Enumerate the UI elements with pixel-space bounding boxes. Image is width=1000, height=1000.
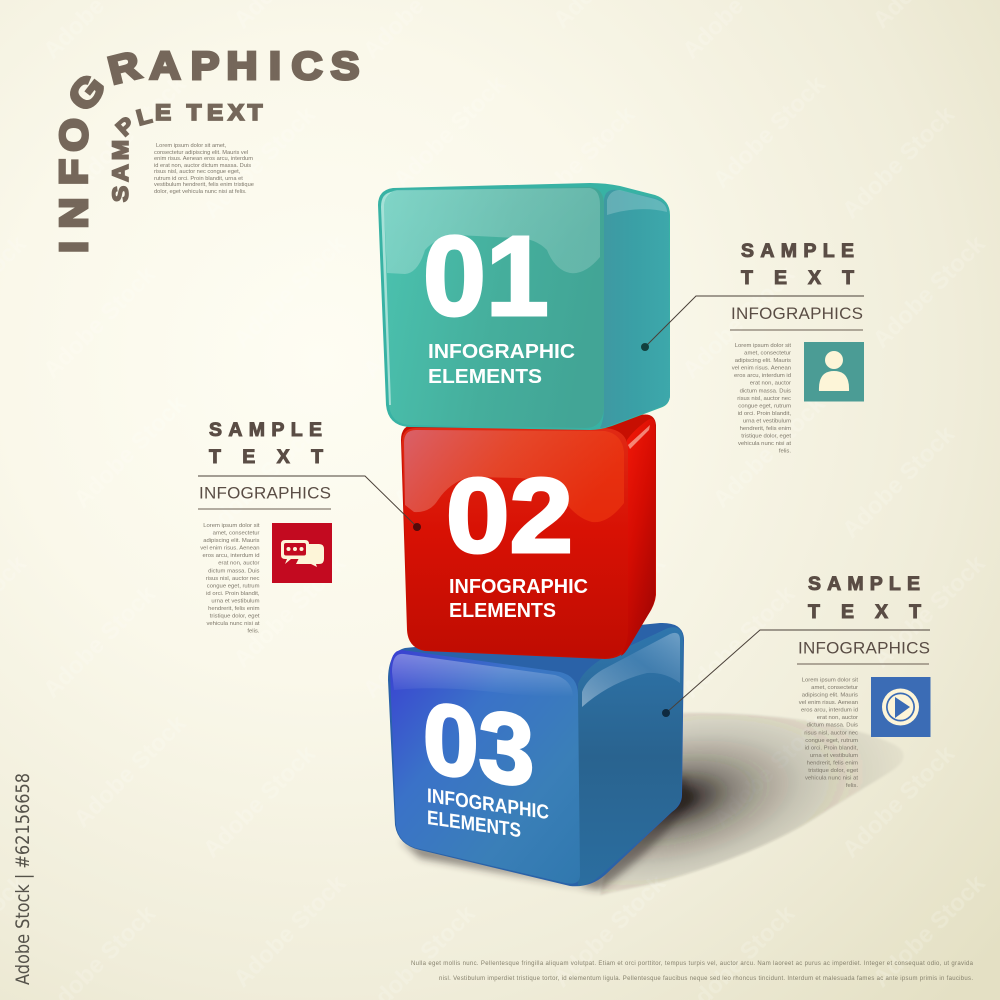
cube 02 label: ELEMENTS [449, 600, 556, 622]
intro paragraph: Lorem ipsum dolor sit amet, [156, 143, 227, 149]
paragraph 02: felis. [247, 629, 260, 635]
curved subtitle: SAMPLE TEXT: T [248, 100, 262, 125]
paragraph 03: felis. [846, 783, 858, 789]
cube 01 left glint [381, 192, 392, 405]
paragraph 03: vehicula nunc nisi at [805, 776, 858, 782]
cube 01 label [428, 341, 575, 388]
heading 03: SAMPLE [808, 573, 920, 595]
leader line 03 [666, 630, 930, 713]
paragraph 02: hendrerit, felis enim [208, 606, 260, 612]
paragraph 02: vel enim risus. Aenean [200, 546, 260, 552]
dot 01 [641, 343, 649, 351]
footer text: Nulla eget mollis nunc. Pellentesque fringilla aliquam volutpat. Etiam et orci porttitor, tempus turpis vel, auctor arcu. Nam laoreet ac purus ac imperdiet. Integer et consequat odio, ut gravida [411, 961, 974, 967]
heading 03 [808, 573, 921, 623]
curved subtitle: SAMPLE TEXT: E [155, 100, 171, 125]
curved title: INFOGRAPHICS: I [52, 241, 96, 253]
icon: chat bubbles [272, 523, 332, 583]
paragraph 01: tristique dolor, eget [741, 434, 791, 440]
intro paragraph: enim risus. Aenean eros arcu, interdum [154, 156, 253, 162]
paragraph 03: eros arcu, interdum id [801, 708, 858, 714]
paragraph 01: eros arcu, interdum id [734, 373, 791, 379]
curved subtitle: SAMPLE TEXT: T [187, 100, 201, 125]
paragraph 01: amet, consectetur [744, 350, 791, 356]
cube 02 right glint [628, 425, 650, 449]
paragraph 02: erat non, auctor [218, 561, 260, 567]
paragraph 02: adipiscing elit. Mauris [203, 538, 260, 544]
cube 03 label: INFOGRAPHIC [427, 785, 549, 824]
dot 03 [662, 709, 670, 717]
paragraph 03: tristique dolor, eget [808, 768, 858, 774]
icon: play button [871, 677, 930, 737]
cube 01 teal [378, 183, 670, 430]
cube 01 gloss [384, 188, 600, 274]
paragraph 02: risus nisl, auctor nec [206, 576, 260, 582]
intro paragraph: id erat non, auctor dictum massa. Duis [154, 163, 251, 169]
curved title: INFOGRAPHICS: O [52, 118, 96, 152]
paragraph 03: dictum massa. Duis [807, 723, 858, 729]
callout 03 [662, 573, 930, 789]
cube 02 front face [402, 428, 628, 658]
cube 02 number: 02 [446, 457, 573, 575]
subheading 02: INFOGRAPHICS [199, 484, 331, 502]
leader line 02 [198, 476, 417, 527]
footer text [411, 961, 974, 982]
paragraph 01: id orci. Proin blandit, [738, 411, 791, 417]
curved subtitle: SAMPLE TEXT: X [228, 100, 245, 125]
cube 02 gloss [404, 430, 624, 522]
curved subtitle: SAMPLE TEXT: L [134, 103, 154, 130]
cube 02 label: INFOGRAPHIC [449, 576, 588, 598]
cube 03 blue [388, 623, 684, 886]
paragraph 01: felis. [779, 449, 791, 455]
curved title: INFOGRAPHICS: F [52, 159, 96, 185]
cube 01 label: INFOGRAPHIC [428, 341, 575, 363]
callout 01 [641, 240, 864, 455]
curved subtitle: SAMPLE TEXT: M [108, 140, 133, 160]
curved subtitle: SAMPLE TEXT [108, 100, 262, 202]
curved subtitle: SAMPLE TEXT: P [111, 112, 140, 141]
paragraph 01: adipiscing elit. Mauris [735, 358, 791, 364]
curved subtitle: SAMPLE TEXT: S [108, 186, 133, 202]
cube 01 front face [381, 187, 604, 428]
paragraph 01: congue eget, rutrum [738, 403, 791, 409]
paragraph 02: urna et vestibulum [211, 598, 260, 604]
footer text: nisl. Vestibulum imperdiet tristique tortor, id elementum ligula. Pellentesque faucibus neque sed leo rhoncus tincidunt. Interdum et malesuada fames ac ante ipsum primis in faucibus. [439, 976, 973, 982]
intro paragraph [154, 143, 254, 195]
cube 01 label: ELEMENTS [428, 366, 542, 388]
curved title: INFOGRAPHICS: N [52, 198, 96, 228]
cube 01 body [378, 183, 670, 430]
intro paragraph: dolor, eget vehicula nunc nisi at felis. [154, 189, 247, 195]
cube 01 number: 01 [423, 213, 549, 339]
curved title: INFOGRAPHICS: I [269, 44, 281, 88]
paragraph 03 [799, 678, 858, 789]
paragraph 02: amet, consectetur [213, 530, 260, 536]
paragraph 03: hendrerit, felis enim [807, 760, 858, 766]
cube 01 right face [600, 190, 670, 428]
paragraph 01 [732, 343, 791, 455]
cube 03 label [427, 785, 549, 842]
paragraph 03: urna et vestibulum [810, 753, 858, 759]
paragraph 01: dictum massa. Duis [740, 388, 791, 394]
paragraph 02: vehicula nunc nisi at [206, 621, 260, 627]
intro paragraph: rutrum id orci. Proin blandit, urna et [154, 176, 243, 182]
paragraph 02: eros arcu, interdum id [203, 553, 260, 559]
curved title: INFOGRAPHICS: C [292, 44, 322, 88]
cube 02 label [449, 576, 588, 622]
paragraph 03: congue eget, rutrum [805, 738, 858, 744]
paragraph 02: tristique dolor, eget [210, 614, 260, 620]
curved title: INFOGRAPHICS: G [59, 66, 114, 119]
paragraph 03: Lorem ipsum dolor sit [802, 678, 858, 684]
paragraph 03: erat non, auctor [817, 715, 858, 721]
heading 02: TEXT [209, 446, 323, 468]
paragraph 02: Lorem ipsum dolor sit [203, 523, 260, 529]
paragraph 03: risus nisl, auctor nec [804, 730, 858, 736]
heading 02 [209, 419, 323, 468]
paragraph 03: adipiscing elit. Mauris [802, 692, 858, 698]
cube 03 front face [390, 650, 580, 884]
leader line 01 [645, 296, 864, 347]
stock id label: Adobe Stock | #62156658 [12, 773, 34, 985]
curved title: INFOGRAPHICS: A [150, 44, 180, 88]
cube 03 right gloss [582, 633, 680, 707]
intro paragraph: vestibulum hendrerit, felis enim tristique [154, 182, 254, 188]
subheading 01: INFOGRAPHICS [731, 304, 863, 323]
cube 02 red [401, 414, 656, 659]
cube 01 right gloss [607, 190, 667, 215]
paragraph 01: urna et vestibulum [743, 418, 791, 424]
heading 01: TEXT [741, 267, 854, 289]
intro paragraph: consectetur adipiscing elit. Mauris vel [154, 150, 248, 156]
curved title: INFOGRAPHICS: S [331, 44, 359, 88]
curved title: INFOGRAPHICS: R [104, 43, 144, 93]
paragraph 03: id orci. Proin blandit, [805, 745, 858, 751]
callout 02 [198, 419, 421, 635]
paragraph 01: erat non, auctor [750, 381, 791, 387]
cube 03 body [388, 623, 684, 886]
paragraph 01: vehicula nunc nisi at [738, 441, 791, 447]
cube 03 number: 03 [423, 681, 534, 809]
heading 03: TEXT [808, 601, 921, 623]
paragraph 03: amet, consectetur [811, 685, 858, 691]
icon: person [804, 342, 864, 402]
curved title: INFOGRAPHICS [52, 43, 359, 253]
paragraph 02 [200, 523, 260, 635]
cube 03 label: ELEMENTS [427, 807, 521, 842]
cube 03 gloss [392, 654, 573, 697]
curved subtitle: SAMPLE TEXT: A [108, 164, 133, 182]
heading 02: SAMPLE [209, 419, 322, 441]
paragraph 01: vel enim risus. Aenean [732, 366, 791, 372]
curved title: INFOGRAPHICS: H [227, 44, 257, 88]
paragraph 01: risus nisl, auctor nec [737, 396, 791, 402]
paragraph 02: dictum massa. Duis [208, 568, 260, 574]
heading 01 [741, 240, 854, 289]
intro paragraph: risus nisl, auctor nec congue eget, [154, 169, 241, 175]
subheading 03: INFOGRAPHICS [798, 638, 930, 658]
paragraph 02: id orci. Proin blandit, [206, 591, 260, 597]
cube 03 right face [578, 627, 683, 886]
paragraph 03: vel enim risus. Aenean [799, 700, 858, 706]
dot 02 [413, 523, 421, 531]
paragraph 02: congue eget, rutrum [207, 583, 260, 589]
heading 01: SAMPLE [741, 240, 854, 262]
curved subtitle: SAMPLE TEXT: E [207, 100, 223, 125]
cube 02 body [401, 414, 656, 659]
curved title: INFOGRAPHICS: P [191, 44, 219, 88]
paragraph 01: Lorem ipsum dolor sit [735, 343, 791, 349]
paragraph 01: hendrerit, felis enim [740, 426, 791, 432]
cube 02 right face [621, 419, 655, 656]
cube cast shadow [400, 713, 903, 895]
